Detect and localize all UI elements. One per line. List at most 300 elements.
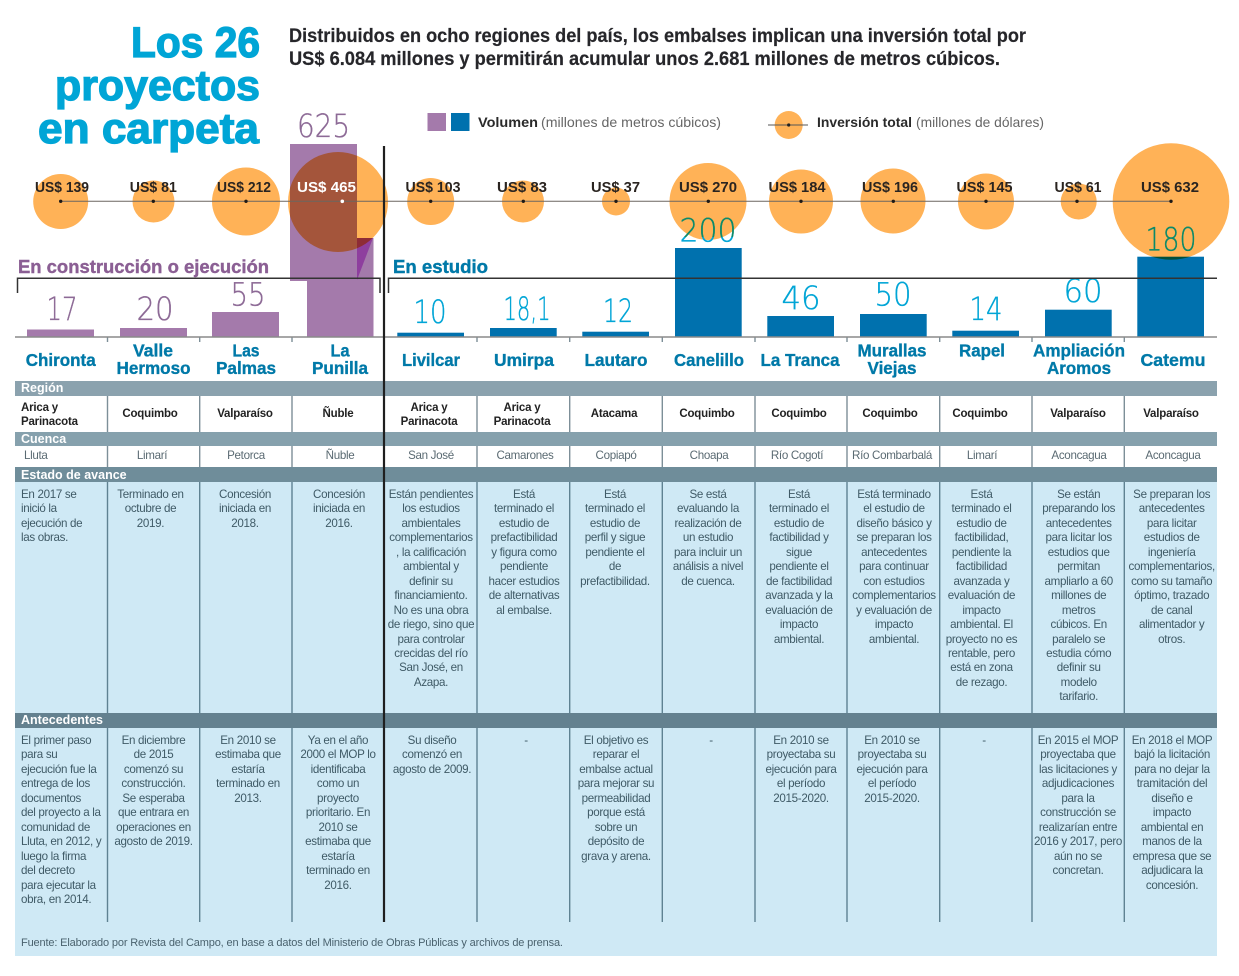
project names: Rapel bbox=[959, 341, 1005, 361]
text: impacto bbox=[780, 618, 818, 631]
text: diseño e bbox=[1151, 792, 1193, 805]
volume values: blue: 10 bbox=[414, 293, 446, 331]
text: Limarí bbox=[967, 449, 997, 462]
text: agosto de 2009. bbox=[393, 763, 471, 776]
text: Ñuble bbox=[326, 449, 354, 462]
brackets bbox=[18, 278, 1217, 293]
text: comenzó en bbox=[402, 748, 462, 761]
text: para continuar bbox=[859, 560, 929, 573]
text: óptimo, trazado bbox=[1134, 589, 1209, 602]
text: Se está bbox=[689, 488, 727, 501]
text: Está bbox=[971, 488, 992, 501]
text: Río Combarbalá bbox=[852, 449, 932, 462]
investment labels: US$ 81 bbox=[130, 180, 177, 196]
text: embalse actual bbox=[579, 763, 653, 776]
text: Está terminado bbox=[857, 488, 931, 501]
band: Región: Región bbox=[21, 381, 63, 395]
text: que entrara en bbox=[118, 806, 189, 819]
investment labels: US$ 139 bbox=[35, 180, 89, 196]
text: estaría bbox=[321, 850, 355, 863]
text: terminado el bbox=[952, 502, 1011, 515]
text: proyecto no es bbox=[946, 633, 1017, 646]
project names: La Tranca bbox=[760, 350, 840, 370]
text: el período bbox=[868, 777, 916, 790]
text: terminado en bbox=[216, 777, 280, 790]
text: modelo bbox=[1061, 676, 1097, 689]
bubbles: inversión total bbox=[33, 143, 1229, 260]
text: pendiente la bbox=[952, 546, 1011, 559]
text: ejecución de bbox=[21, 517, 82, 530]
text: Terminado en bbox=[117, 488, 184, 501]
text: Aconcagua bbox=[1145, 449, 1201, 462]
band: Antecedentes bbox=[15, 713, 1217, 728]
text: para mejorar su bbox=[578, 777, 654, 790]
text: estudia cómo bbox=[1046, 647, 1111, 660]
text: para ejecutar la bbox=[21, 879, 96, 892]
text: ambiental. bbox=[869, 633, 919, 646]
text: concretan. bbox=[1053, 864, 1103, 877]
band: Cuenca: Cuenca bbox=[21, 432, 66, 446]
text: definir su bbox=[1057, 661, 1101, 674]
text: manos de la bbox=[1142, 835, 1202, 848]
text: impacto bbox=[875, 618, 913, 631]
text: Camarones bbox=[496, 449, 554, 462]
text: San José bbox=[408, 449, 454, 462]
text: adjudicaciones bbox=[1042, 777, 1114, 790]
text: En 2010 se bbox=[220, 734, 276, 747]
band: Antecedentes: Antecedentes bbox=[21, 713, 103, 727]
text: Atacama bbox=[591, 408, 637, 420]
text: Ya en el año bbox=[308, 734, 368, 747]
text: construcción se bbox=[1040, 806, 1116, 819]
row: Estado de avance text bbox=[21, 148, 1215, 703]
group heading: en construcción o ejecución: En construcción o ejecución bbox=[18, 256, 269, 277]
text: ejecución para bbox=[766, 763, 836, 776]
text: tarifario. bbox=[1059, 690, 1098, 703]
volume values: purple bbox=[46, 107, 350, 328]
text: pendiente el bbox=[769, 560, 829, 573]
text: Se están bbox=[1057, 488, 1100, 501]
text: estimaba que bbox=[305, 835, 371, 848]
text: evaluación de bbox=[948, 589, 1015, 602]
text: El objetivo es bbox=[584, 734, 648, 747]
text: proyecto bbox=[317, 792, 359, 805]
text: pendiente el bbox=[585, 546, 645, 559]
text: pendiente bbox=[500, 560, 548, 573]
text: diseño básico y bbox=[856, 517, 932, 530]
text: Arica y bbox=[21, 402, 58, 414]
text: Azapa. bbox=[414, 676, 448, 689]
text: Están pendientes bbox=[389, 488, 473, 501]
text: de bbox=[609, 560, 621, 573]
text: identificaba bbox=[311, 763, 365, 776]
text: En 2015 el MOP bbox=[1038, 734, 1118, 747]
text: - bbox=[982, 734, 986, 747]
text: ambiental en bbox=[1141, 821, 1203, 834]
text: obra, en 2014. bbox=[21, 893, 91, 906]
text: Su diseño bbox=[408, 734, 456, 747]
text: Coquimbo bbox=[952, 408, 1008, 420]
text: Aconcagua bbox=[1051, 449, 1107, 462]
text: de 2015 bbox=[134, 748, 173, 761]
text: No es una obra bbox=[394, 604, 468, 617]
text: del proyecto a la bbox=[21, 806, 101, 819]
text: evaluando la bbox=[677, 502, 739, 515]
text: 2016 y 2017, pero bbox=[1034, 835, 1122, 848]
text: estaría bbox=[231, 763, 265, 776]
panel: antecedentes background bbox=[15, 728, 1217, 956]
volume values: blue: 60 bbox=[1064, 272, 1102, 310]
text: el período bbox=[777, 777, 825, 790]
text: 2010 se bbox=[318, 821, 358, 834]
subtitle: Distribuidos en ocho regiones del país, los embalses implican una inversión total por bbox=[289, 26, 1027, 47]
text: de alternativas bbox=[489, 589, 559, 602]
text: está en zona bbox=[950, 661, 1013, 674]
volume values: blue: 12 bbox=[603, 292, 633, 330]
text: 2015-2020. bbox=[864, 792, 920, 805]
text: Choapa bbox=[690, 449, 728, 462]
title: proyectos bbox=[55, 62, 260, 110]
text: de riego, sino que bbox=[388, 618, 474, 631]
text: - bbox=[524, 734, 528, 747]
investment labels: US$ 37 bbox=[591, 180, 640, 196]
text: de factibilidad bbox=[766, 575, 832, 588]
volume values: blue: 14 bbox=[970, 290, 1002, 328]
text: con estudios bbox=[863, 575, 925, 588]
text: ejecución fue la bbox=[21, 763, 96, 776]
band: Cuenca bbox=[15, 432, 1217, 446]
investment labels: US$ 632 bbox=[1141, 180, 1199, 196]
text: Coquimbo bbox=[679, 408, 735, 420]
project names: Livilcar bbox=[402, 350, 460, 370]
text: iniciada en bbox=[219, 502, 271, 515]
panel: estado de avance background bbox=[15, 482, 1217, 713]
project names: Palmas bbox=[216, 358, 276, 378]
text: millones de bbox=[1051, 589, 1106, 602]
text: proyectaba su bbox=[767, 748, 835, 761]
text: permitan bbox=[1057, 560, 1100, 573]
text: antecedentes bbox=[1046, 517, 1112, 530]
text: porque está bbox=[587, 806, 645, 819]
title: Los 26 bbox=[131, 19, 260, 67]
project names bbox=[26, 341, 1206, 378]
text: empresa que se bbox=[1133, 850, 1211, 863]
legend: volumen: (millones de metros cúbicos) bbox=[541, 114, 721, 130]
text: iniciada en bbox=[313, 502, 365, 515]
text: perfil y sigue bbox=[585, 531, 645, 544]
volume values: purple: 17 bbox=[46, 290, 78, 328]
text: complementarios bbox=[389, 531, 473, 544]
subtitle: US$ 6.084 millones y permitirán acumular unos 2.681 millones de metros cúbicos. bbox=[289, 49, 1000, 70]
text: impacto bbox=[962, 604, 1001, 617]
text: Está bbox=[604, 488, 626, 501]
band: Estado de avance bbox=[15, 467, 1217, 482]
text: Valparaíso bbox=[1050, 408, 1106, 420]
text: Copiapó bbox=[596, 449, 636, 462]
source note: Fuente: Elaborado por Revista del Campo, en base a datos del Ministerio de Obras Públicas y archivos de prensa. bbox=[21, 937, 563, 949]
text: En 2018 el MOP bbox=[1132, 734, 1212, 747]
text: Parinacota bbox=[21, 416, 78, 428]
text: terminado el bbox=[585, 502, 645, 515]
text: antecedentes bbox=[1139, 502, 1205, 515]
text: estudio de bbox=[774, 517, 824, 530]
text: sigue bbox=[786, 546, 812, 559]
text: 2018. bbox=[231, 517, 259, 530]
text: para no dejar la bbox=[1134, 763, 1210, 776]
text: Valparaíso bbox=[1143, 408, 1199, 420]
text: ambiental y bbox=[403, 560, 459, 573]
text: factibilidad y bbox=[769, 531, 829, 544]
project names: Hermoso bbox=[116, 358, 190, 378]
text: adjudicara la bbox=[1141, 864, 1203, 877]
band: Región bbox=[15, 381, 1217, 396]
text: Parinacota bbox=[401, 416, 457, 428]
text: al embalse. bbox=[496, 604, 552, 617]
text: Concesión bbox=[219, 488, 271, 501]
text: un estudio bbox=[683, 531, 733, 544]
text: terminado el bbox=[769, 502, 829, 515]
text: En diciembre bbox=[122, 734, 185, 747]
text: terminado en bbox=[306, 864, 370, 877]
text: el estudio de bbox=[863, 502, 925, 515]
text: prefactibilidad bbox=[491, 531, 557, 544]
text: de rezago. bbox=[956, 676, 1007, 689]
text: Río Cogotí bbox=[771, 449, 823, 462]
text: operaciones en bbox=[116, 821, 191, 834]
text: las obras. bbox=[21, 531, 68, 544]
project names: Valle bbox=[133, 341, 173, 361]
text: prefactibilidad. bbox=[580, 575, 650, 588]
text: sobre un bbox=[595, 821, 637, 834]
text: análisis a nivel bbox=[673, 560, 743, 573]
volume values: purple: 55 bbox=[230, 276, 266, 314]
text: definir su bbox=[409, 575, 453, 588]
investment labels bbox=[35, 180, 1199, 196]
investment labels: US$ 61 bbox=[1054, 180, 1102, 196]
text: estimaba que bbox=[215, 748, 281, 761]
text: Se esperaba bbox=[122, 792, 185, 805]
text: octubre de bbox=[125, 502, 176, 515]
text: inició la bbox=[21, 502, 57, 515]
text: Está bbox=[788, 488, 810, 501]
text: realización de bbox=[674, 517, 742, 530]
text: ambiental. bbox=[774, 633, 824, 646]
text: como un bbox=[317, 777, 359, 790]
text: rentable, pero bbox=[948, 647, 1015, 660]
text: Parinacota bbox=[494, 416, 550, 428]
volume values: purple: 625 bbox=[297, 107, 350, 145]
baseline bbox=[15, 336, 1217, 338]
text: luego la firma bbox=[21, 850, 86, 863]
investment labels: US$ 270 bbox=[679, 180, 737, 196]
text: ambiental. El bbox=[950, 618, 1013, 631]
text: En 2017 se bbox=[21, 488, 76, 501]
text: estudios de bbox=[1144, 531, 1200, 544]
project names: Umirpa bbox=[494, 350, 554, 370]
group heading: en estudio: En estudio bbox=[393, 256, 488, 277]
text: permeabilidad bbox=[582, 792, 650, 805]
text: Arica y bbox=[411, 402, 447, 414]
text: complementarios, bbox=[1128, 560, 1215, 573]
text: de cuenca. bbox=[681, 575, 735, 588]
volume values: blue bbox=[414, 212, 1196, 331]
volume values: blue: 18,1 bbox=[504, 290, 550, 328]
text: metros bbox=[1062, 604, 1095, 617]
text: 2019. bbox=[137, 517, 164, 530]
investment labels: US$ 196 bbox=[862, 180, 918, 196]
text: estudio de bbox=[956, 517, 1007, 530]
text: cúbicos. En bbox=[1050, 618, 1107, 631]
project names: Lautaro bbox=[584, 350, 648, 370]
text: Se preparan los bbox=[1133, 488, 1210, 501]
text: crecidas del río bbox=[394, 647, 468, 660]
text: evaluación de bbox=[765, 604, 833, 617]
legend: volumen: Volumen bbox=[478, 114, 538, 130]
text: para licitar bbox=[1147, 517, 1196, 530]
legend: inversión total bbox=[768, 111, 1044, 139]
text: realizarían entre bbox=[1039, 821, 1117, 834]
text: las licitaciones y bbox=[1039, 763, 1117, 776]
text: Concesión bbox=[313, 488, 365, 501]
text: impacto bbox=[1153, 806, 1191, 819]
text: Ñuble bbox=[323, 408, 353, 420]
text: Coquimbo bbox=[862, 408, 918, 420]
text: 2016. bbox=[324, 879, 352, 892]
text: grava y arena. bbox=[581, 850, 651, 863]
volume values: purple: 20 bbox=[136, 290, 174, 328]
text: alimentador y bbox=[1139, 618, 1204, 631]
text: factibilidad bbox=[956, 560, 1007, 573]
text: San José, en bbox=[399, 661, 463, 674]
text: bajó la licitación bbox=[1134, 748, 1210, 761]
text: El primer paso bbox=[21, 734, 91, 747]
project names: Viejas bbox=[868, 358, 917, 378]
text: factibilidad, bbox=[955, 531, 1008, 544]
project names: Punilla bbox=[312, 358, 368, 378]
text: Limarí bbox=[137, 449, 167, 462]
text: 2000 el MOP lo bbox=[300, 748, 376, 761]
text: financiamiento. bbox=[394, 589, 468, 602]
title: en carpeta bbox=[38, 105, 260, 153]
text: Valparaíso bbox=[217, 408, 273, 420]
text: prioritario. En bbox=[306, 806, 370, 819]
text: otros. bbox=[1158, 633, 1185, 646]
volume values: blue: 46 bbox=[782, 279, 820, 317]
text: entrega de los bbox=[21, 777, 90, 790]
text: comenzó su bbox=[124, 763, 183, 776]
text: 2015-2020. bbox=[773, 792, 829, 805]
investment labels: US$ 83 bbox=[497, 180, 547, 196]
project names: Canelillo bbox=[674, 350, 744, 370]
volume values: blue: 50 bbox=[874, 276, 912, 314]
text: Lluta bbox=[24, 449, 48, 462]
text: para la bbox=[1061, 792, 1095, 805]
text: para incluir un bbox=[674, 546, 742, 559]
text: En 2010 se bbox=[773, 734, 829, 747]
text: Coquimbo bbox=[771, 408, 827, 420]
text: aún no se bbox=[1054, 850, 1102, 863]
text: se preparan los bbox=[856, 531, 932, 544]
text: 2013. bbox=[234, 792, 262, 805]
text: avanzada y bbox=[953, 575, 1010, 588]
text: Coquimbo bbox=[122, 408, 178, 420]
project names: Ampliación bbox=[1033, 341, 1125, 361]
text: terminado el bbox=[494, 502, 554, 515]
project names: Las bbox=[232, 341, 260, 361]
text: ampliarlo a 60 bbox=[1045, 575, 1113, 588]
text: complementarios bbox=[852, 589, 936, 602]
text: y figura como bbox=[491, 546, 557, 559]
subtitle bbox=[289, 26, 1027, 70]
text: avanzada y la bbox=[765, 589, 833, 602]
text: - bbox=[709, 734, 713, 747]
text: y evaluación de bbox=[856, 604, 932, 617]
project names: La bbox=[330, 341, 350, 361]
text: Arica y bbox=[504, 402, 540, 414]
project names: Aromos bbox=[1047, 358, 1111, 378]
text: agosto de 2019. bbox=[114, 835, 193, 848]
text: Lluta, en 2012, y bbox=[21, 835, 101, 848]
text: estudio de bbox=[499, 517, 549, 530]
text: reparar el bbox=[593, 748, 639, 761]
legend: inversión total: (millones de dólares) bbox=[916, 114, 1044, 130]
text: , la calificación bbox=[396, 546, 466, 559]
investment labels: US$ 465 bbox=[297, 180, 356, 196]
investment labels: US$ 103 bbox=[406, 180, 460, 196]
text: proyectaba que bbox=[1040, 748, 1116, 761]
text: comunidad de bbox=[21, 821, 90, 834]
row: Cuenca values bbox=[24, 448, 1201, 462]
band: Estado de avance: Estado de avance bbox=[21, 468, 127, 482]
bubble axis with dots bbox=[59, 200, 1173, 203]
text: de canal bbox=[1151, 604, 1192, 617]
text: ingeniería bbox=[1148, 546, 1196, 559]
text: Está bbox=[513, 488, 535, 501]
bars: en construcción o ejecución bbox=[27, 144, 374, 337]
text: tramitación del bbox=[1137, 777, 1207, 790]
row: Región values bbox=[21, 402, 1199, 428]
text: depósito de bbox=[588, 835, 644, 848]
text: 2016. bbox=[325, 517, 353, 530]
legend: volumen bbox=[428, 113, 721, 131]
text: estudios que bbox=[1048, 546, 1110, 559]
project names: Murallas bbox=[858, 341, 927, 361]
text: construcción. bbox=[121, 777, 186, 790]
text: los estudios bbox=[402, 502, 460, 515]
text: para su bbox=[21, 748, 57, 761]
text: como su tamaño bbox=[1131, 575, 1212, 588]
investment labels: US$ 184 bbox=[768, 180, 826, 196]
text: documentos bbox=[21, 792, 81, 805]
text: antecedentes bbox=[861, 546, 927, 559]
text: ejecución para bbox=[857, 763, 927, 776]
legend: inversión total: Inversión total bbox=[817, 114, 912, 130]
title bbox=[38, 19, 260, 153]
row: Antecedentes text bbox=[21, 734, 1212, 906]
text: para controlar bbox=[397, 633, 465, 646]
investment labels: US$ 145 bbox=[956, 180, 1012, 196]
text: estudio de bbox=[590, 517, 640, 530]
text: preparando los bbox=[1042, 502, 1115, 515]
volume values: blue: 180 bbox=[1146, 220, 1196, 258]
text: proyectaba su bbox=[858, 748, 926, 761]
project names: Chironta bbox=[26, 350, 96, 370]
text: ambientales bbox=[402, 517, 460, 530]
text: del decreto bbox=[21, 864, 75, 877]
text: para licitar los bbox=[1045, 531, 1112, 544]
project names: Catemu bbox=[1140, 350, 1206, 370]
text: hacer estudios bbox=[489, 575, 559, 588]
